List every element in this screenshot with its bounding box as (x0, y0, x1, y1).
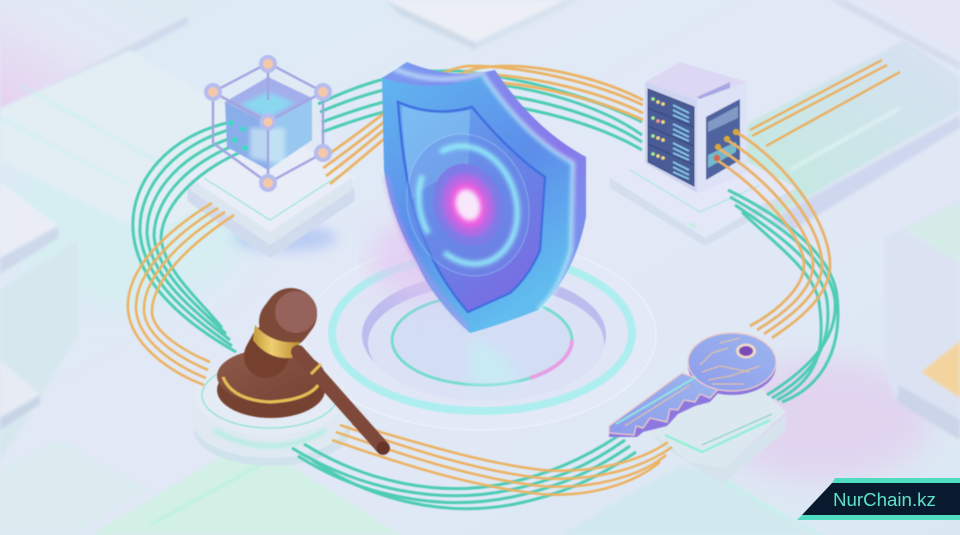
icon: circuit key (609, 333, 776, 437)
shield side (382, 62, 586, 333)
key extrusion (609, 337, 776, 437)
cable bundle: teal, server across top to cube (318, 71, 642, 150)
icon: gavel (217, 291, 390, 454)
icon: server rack (645, 62, 747, 193)
key hole (736, 344, 756, 358)
shield highlight edges (483, 75, 573, 310)
logo badge: NurChain.kz: NurChain.kz (833, 489, 936, 510)
shield concentric target (389, 118, 547, 292)
key blade with teeth (609, 373, 720, 435)
rack vents (673, 105, 689, 179)
panel: top-right plate (760, 0, 960, 70)
panel: top-left plate (0, 0, 188, 122)
key shaft stripes (616, 377, 696, 424)
rack LEDs (651, 97, 665, 160)
cable bundle: teal, gavel to key along bottom (292, 436, 636, 509)
inner glass cube (225, 77, 312, 170)
sound block (217, 349, 325, 418)
rack units (648, 89, 694, 186)
panel: right block with amber tile (885, 200, 960, 440)
platform: key (650, 378, 786, 485)
gavel head (253, 291, 317, 358)
platform: server (610, 130, 792, 246)
panel: mint band behind server (725, 40, 960, 232)
cable bundle: orange, server to upper right (750, 60, 900, 146)
icon: shield (370, 62, 586, 333)
cable bundle: orange, gavel to key along bottom (332, 424, 672, 495)
key traces (700, 338, 760, 384)
server cables with gold connectors, running round right to the key (714, 129, 830, 338)
shield face (382, 75, 573, 333)
cable bundle: orange, server across top to cube (320, 66, 643, 184)
panel: bottom-left mint strip (0, 440, 400, 535)
cube teal connectors (228, 120, 248, 151)
cable bundle: teal, cube around left to gavel (133, 122, 246, 352)
wire frame (213, 63, 323, 183)
cable bundle: teal, key round right to server (728, 190, 838, 402)
side port panel (706, 99, 740, 180)
panel: bottom-right strip (560, 465, 820, 535)
logo badge: NurChain.kz (797, 478, 960, 520)
icon: blockchain cube (206, 57, 330, 190)
panel: left block (0, 182, 78, 462)
shield light wedge (402, 106, 470, 200)
panel: top-centre plate (385, 0, 580, 50)
key bow (688, 333, 776, 391)
gavel handle (298, 352, 390, 454)
glow beneath shield (370, 220, 470, 300)
platform: cube (190, 130, 352, 255)
nodes (206, 57, 330, 190)
central disc platform (304, 240, 656, 430)
panel: left upper strip (0, 50, 300, 235)
platform: gavel (192, 355, 350, 466)
shield inner panel (398, 102, 545, 312)
cable bundle: orange, cube around left to gavel (128, 203, 234, 385)
